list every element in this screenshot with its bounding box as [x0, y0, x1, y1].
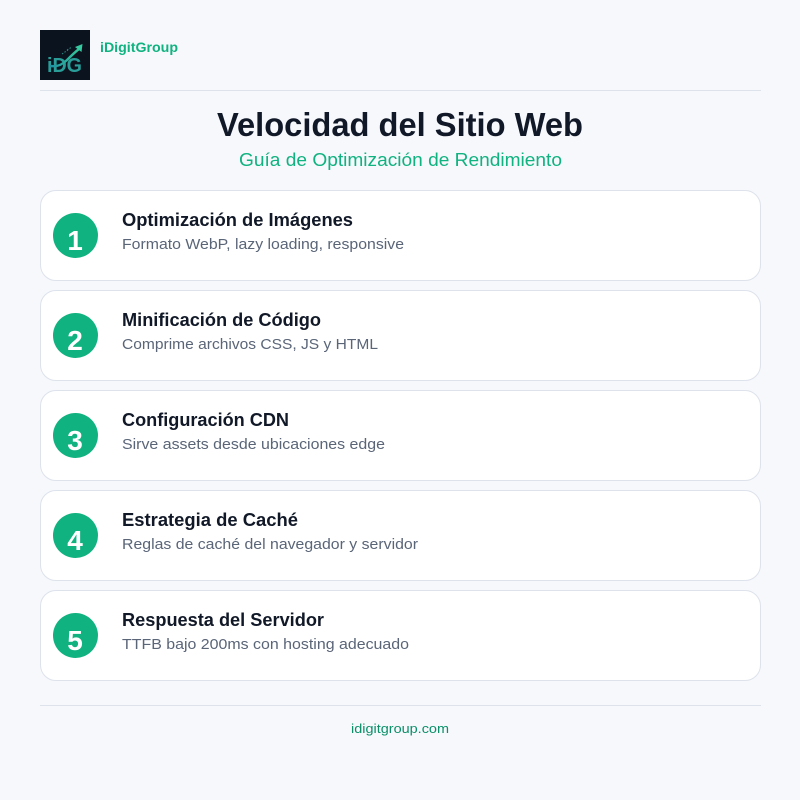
number badge 5 — [53, 613, 98, 658]
panel: step 4 — [40, 490, 760, 580]
panel: step 2 — [40, 290, 760, 380]
number badge 5: 5 — [67, 625, 83, 656]
step 5 heading: Respuesta del Servidor — [122, 610, 324, 630]
step 3 description: Sirve assets desde ubicaciones edge — [122, 437, 385, 453]
step 4 description: Reglas de caché del navegador y servidor — [122, 537, 418, 553]
footer url: idigitgroup.com — [351, 721, 449, 736]
step 2 heading: Minificación de Código — [122, 310, 321, 330]
number badge 3: 3 — [67, 425, 83, 456]
number badge 3 — [53, 413, 98, 458]
subtitle: Guía de Optimización de Rendimiento — [239, 150, 562, 170]
number badge 2: 2 — [67, 325, 83, 356]
title: Velocidad del Sitio Web — [217, 106, 583, 143]
number badge 1 — [53, 213, 98, 258]
panel: step 3 — [40, 390, 760, 480]
panel: step 5 — [40, 590, 760, 680]
number badge 4 — [53, 513, 98, 558]
number badge 4: 4 — [67, 525, 83, 556]
panel: step 1 — [40, 190, 760, 280]
step 3 heading: Configuración CDN — [122, 410, 289, 430]
brand name: iDigitGroup — [100, 39, 178, 55]
step 1 description: Formato WebP, lazy loading, responsive — [122, 237, 404, 253]
icon: iDigitGroup logo: iDG — [47, 55, 82, 77]
step 5 description: TTFB bajo 200ms con hosting adecuado — [122, 637, 409, 653]
number badge 1: 1 — [67, 225, 83, 256]
header: brand — [40, 30, 178, 80]
step 4 heading: Estrategia de Caché — [122, 510, 298, 530]
number badge 2 — [53, 313, 98, 358]
step 2 description: Comprime archivos CSS, JS y HTML — [122, 337, 378, 353]
step 1 heading: Optimización de Imágenes — [122, 210, 353, 230]
